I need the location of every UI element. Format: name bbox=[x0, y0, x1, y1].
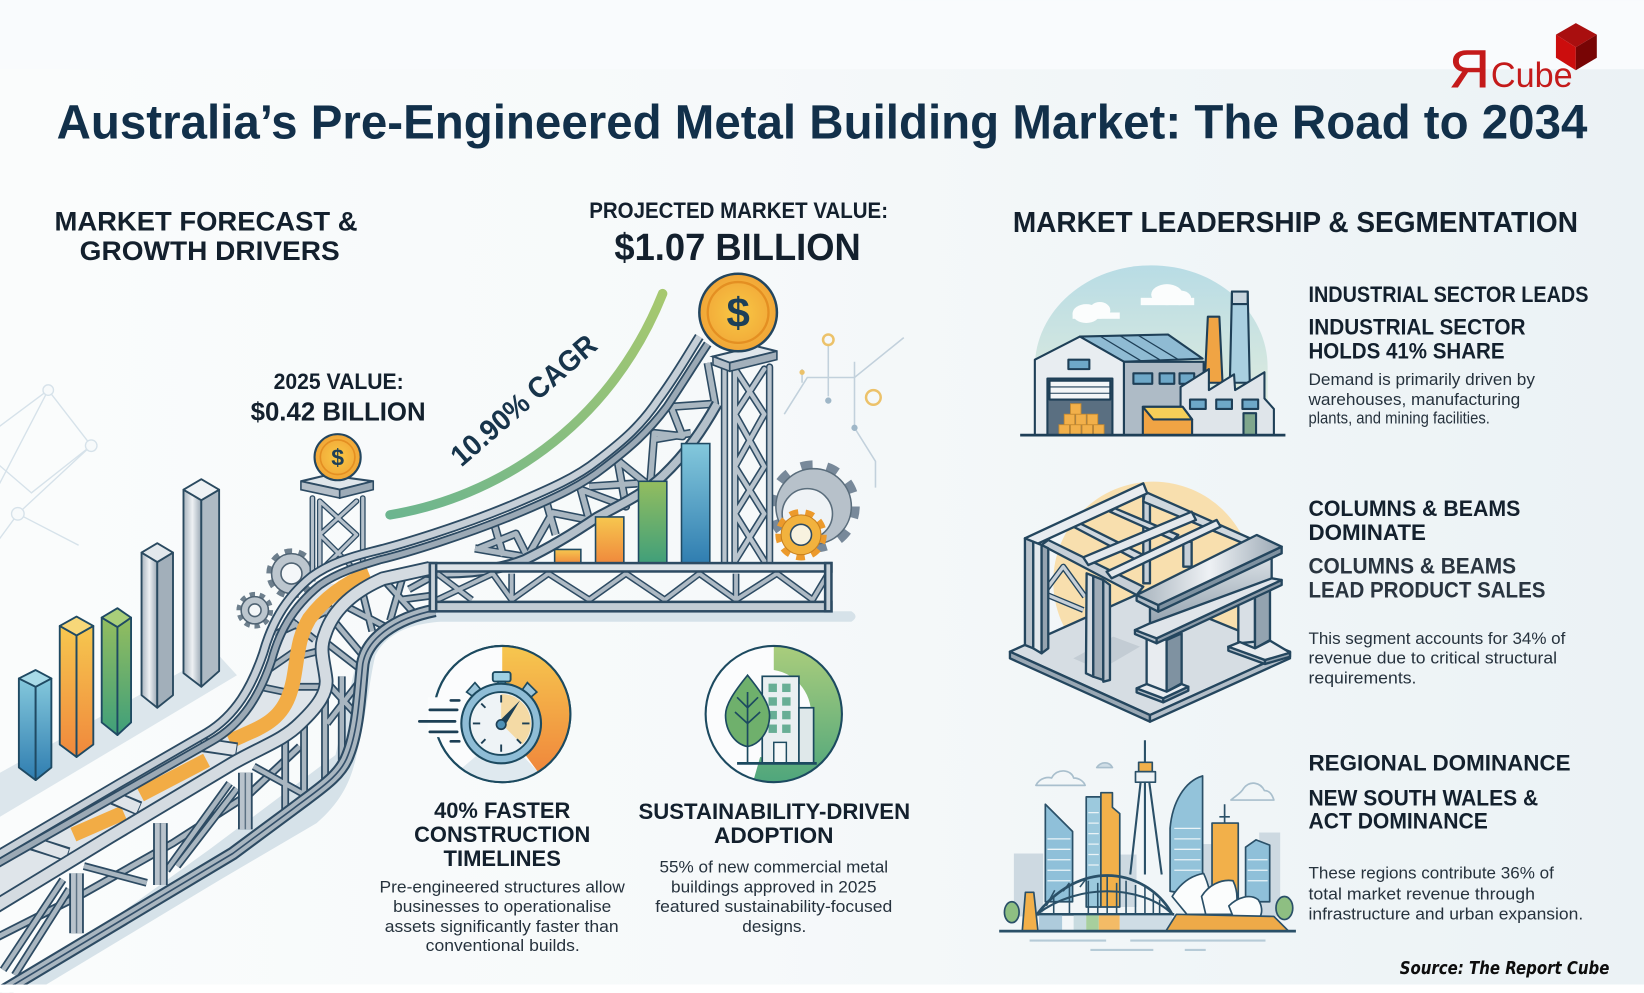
road top rail bbox=[0, 337, 699, 860]
icon: stopwatch bbox=[419, 646, 570, 782]
body: This segment accounts for 34% of bbox=[1308, 629, 1566, 648]
text block: columns and beams bbox=[1308, 496, 1566, 688]
coin: projected bbox=[699, 274, 777, 351]
water lines bbox=[1030, 941, 1266, 950]
title: Australia’s Pre-Engineered Metal Building Market: The Road to 2034 bbox=[57, 95, 1588, 149]
back columns bbox=[1143, 497, 1192, 583]
main beam bbox=[1135, 535, 1282, 643]
heading: INDUSTRIAL SECTOR bbox=[1308, 315, 1526, 340]
right column bbox=[1238, 587, 1270, 648]
icon: steel frame bbox=[1010, 482, 1290, 722]
harbour bridge bbox=[1022, 876, 1174, 931]
body bbox=[1308, 864, 1583, 924]
gear: lower left bbox=[239, 595, 271, 626]
heading bbox=[1308, 554, 1545, 603]
label: DOMINATE bbox=[1308, 520, 1426, 545]
callout: projected market value: PROJECTED MARKET VALUE: bbox=[589, 198, 888, 223]
logo wordmark: Я bbox=[1449, 41, 1490, 99]
body bbox=[1308, 629, 1566, 688]
bar: green bbox=[102, 608, 131, 735]
bottom edge band bbox=[0, 985, 1644, 993]
text block: faster construction bbox=[380, 798, 625, 955]
body bbox=[380, 877, 625, 955]
body bbox=[655, 857, 892, 936]
bar: blue bbox=[682, 444, 710, 564]
heading: ACT DOMINANCE bbox=[1308, 808, 1488, 833]
heading: market forecast and growth drivers bbox=[55, 207, 358, 266]
road surface bbox=[0, 337, 708, 910]
water colours bbox=[1039, 915, 1172, 930]
bar: orange bbox=[60, 617, 93, 757]
body: featured sustainability-focused bbox=[655, 897, 892, 916]
body: designs. bbox=[742, 917, 806, 936]
bridge shadow bbox=[21, 611, 856, 985]
heading: HOLDS 41% SHARE bbox=[1308, 339, 1505, 364]
bar: grey tall bbox=[183, 479, 219, 687]
back rail bbox=[0, 747, 300, 938]
left column bbox=[1025, 538, 1085, 653]
heading: TIMELINES bbox=[444, 846, 561, 871]
body: conventional builds. bbox=[426, 936, 580, 955]
decorative network: left bbox=[0, 385, 97, 545]
road inner rail bbox=[0, 344, 708, 868]
source note: Source: The Report Cube bbox=[1400, 958, 1609, 979]
logo: RCube bbox=[1449, 23, 1597, 99]
truss lattice bbox=[3, 574, 432, 975]
heading bbox=[1308, 315, 1526, 364]
opera house bbox=[1166, 873, 1289, 931]
trees bbox=[1004, 896, 1293, 923]
top header strip bbox=[0, 0, 1644, 69]
bar: orange bbox=[596, 517, 624, 564]
body: warehouses, manufacturing bbox=[1307, 390, 1520, 409]
body: businesses to operationalise bbox=[393, 897, 611, 916]
callout: projected market value bbox=[589, 198, 888, 268]
heading: market forecast and growth drivers: MARKET FORECAST & bbox=[55, 207, 358, 237]
heading bbox=[1308, 785, 1538, 833]
icon: leaf and building bbox=[706, 646, 842, 782]
heading: ADOPTION bbox=[714, 823, 834, 848]
heading bbox=[414, 798, 590, 871]
road lower rail bbox=[0, 568, 430, 910]
body: revenue due to critical structural bbox=[1308, 649, 1557, 668]
road deck bbox=[0, 579, 383, 910]
arch lattice bbox=[475, 363, 715, 557]
heading: 40% FASTER bbox=[434, 798, 570, 823]
bar: small orange bbox=[555, 549, 581, 564]
callout: projected market value: $1.07 BILLION bbox=[614, 226, 861, 268]
logo cube label: Cube bbox=[1491, 55, 1573, 95]
bar: blue bbox=[19, 670, 51, 780]
bridge truss and road bbox=[0, 363, 717, 993]
decorative circuit lines bbox=[784, 335, 904, 488]
front column base bbox=[1137, 684, 1188, 702]
small colour bars under arch bbox=[555, 444, 710, 564]
heading: NEW SOUTH WALES & bbox=[1308, 785, 1538, 810]
right tower with coin bbox=[699, 274, 777, 563]
body: 55% of new commercial metal bbox=[659, 857, 888, 876]
arch lower chord bbox=[419, 404, 717, 573]
body: Demand is primarily driven by bbox=[1308, 370, 1536, 389]
road cross ties bbox=[31, 744, 237, 855]
logo cube bbox=[1556, 23, 1597, 70]
floor shadow bbox=[1073, 637, 1140, 670]
text block: industrial sector bbox=[1307, 282, 1588, 428]
front column bbox=[1147, 633, 1182, 692]
body: assets significantly faster than bbox=[385, 917, 619, 936]
gear: upper left bbox=[269, 552, 313, 596]
coin: 2025: $ bbox=[331, 445, 344, 471]
callout: 2025 value bbox=[251, 369, 426, 426]
label bbox=[1308, 496, 1520, 545]
ground line bbox=[1020, 434, 1285, 436]
centre column bbox=[1086, 573, 1110, 682]
text block: regional dominance bbox=[1308, 751, 1583, 924]
sydney tower bbox=[1130, 740, 1162, 874]
horizontal truss bbox=[430, 563, 831, 611]
label: REGIONAL DOMINANCE bbox=[1308, 751, 1571, 776]
slab bbox=[1010, 592, 1290, 722]
heading: COLUMNS & BEAMS bbox=[1308, 554, 1516, 579]
heading: CONSTRUCTION bbox=[414, 822, 590, 847]
boxes bbox=[1059, 404, 1104, 435]
left tower with coin bbox=[301, 434, 373, 571]
growth arc bbox=[390, 294, 663, 515]
icon: industrial factory bbox=[1020, 265, 1285, 435]
label: INDUSTRIAL SECTOR LEADS bbox=[1308, 282, 1588, 307]
label: 10.90% CAGR: 10.90% CAGR bbox=[444, 328, 604, 473]
text block: sustainability bbox=[639, 799, 910, 936]
clouds bbox=[1036, 763, 1274, 800]
isometric bar chart bbox=[0, 479, 237, 817]
heading: market leadership and segmentation: MARKET LEADERSHIP & SEGMENTATION bbox=[1013, 206, 1578, 238]
body: These regions contribute 36% of bbox=[1308, 864, 1554, 883]
background buildings bbox=[1014, 833, 1280, 916]
sun bbox=[1053, 482, 1253, 682]
lower chord bbox=[0, 610, 435, 993]
callout: 2025 value: 2025 VALUE: bbox=[274, 369, 404, 394]
heading: market forecast and growth drivers: GROWTH DRIVERS bbox=[80, 236, 340, 266]
label: COLUMNS & BEAMS bbox=[1308, 496, 1520, 521]
truss verticals bbox=[77, 773, 245, 933]
warehouse bbox=[1035, 292, 1274, 435]
road yellow lane bbox=[73, 574, 369, 835]
heading: SUSTAINABILITY-DRIVEN bbox=[639, 799, 910, 824]
body bbox=[1307, 370, 1536, 428]
heading: LEAD PRODUCT SALES bbox=[1308, 578, 1545, 603]
body: infrastructure and urban expansion. bbox=[1308, 905, 1583, 924]
body: Pre-engineered structures allow bbox=[380, 877, 625, 896]
ground line bbox=[999, 930, 1296, 932]
bar: green bbox=[639, 481, 667, 564]
right column base bbox=[1228, 641, 1290, 664]
body: requirements. bbox=[1308, 669, 1416, 688]
clouds bbox=[1073, 284, 1194, 323]
icon: sydney skyline bbox=[999, 740, 1296, 950]
body: total market revenue through bbox=[1308, 885, 1535, 904]
callout: 2025 value: $0.42 BILLION bbox=[251, 396, 426, 426]
body: plants, and mining facilities. bbox=[1308, 409, 1490, 428]
dome bbox=[1035, 265, 1268, 433]
bar: grey short bbox=[142, 543, 173, 708]
big gear bbox=[773, 466, 855, 547]
building stripes bbox=[1047, 813, 1268, 881]
tall buildings bbox=[1045, 776, 1270, 907]
small gears bbox=[239, 552, 313, 626]
orange gear bbox=[779, 513, 823, 557]
body: buildings approved in 2025 bbox=[671, 877, 877, 896]
heading bbox=[639, 799, 910, 848]
roof frame bbox=[1025, 483, 1250, 595]
coin: projected: $ bbox=[726, 289, 750, 336]
